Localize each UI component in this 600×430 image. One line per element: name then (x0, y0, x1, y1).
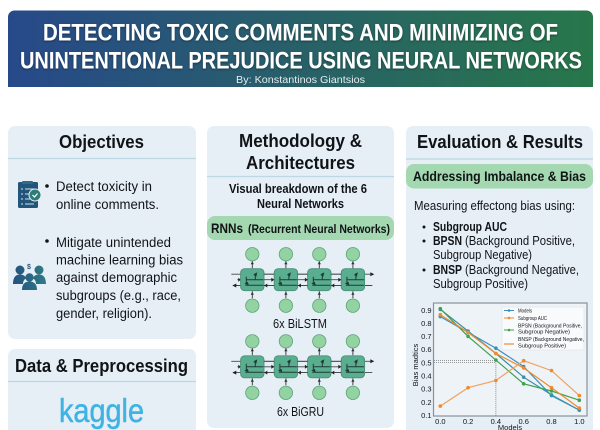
icon: people group: $ (27, 264, 31, 271)
diagram: BiLSTM (231, 248, 374, 312)
header banner (8, 10, 593, 87)
section pill: RNNs: RNNs (211, 220, 243, 236)
objective 2: machine learning bias (56, 252, 183, 268)
y axis ticks: 0.4 (421, 372, 432, 381)
legend: BPSN (Background Positive, (518, 324, 582, 330)
metrics list: Subgroup Positive) (433, 277, 528, 291)
subtitle: Neural Networks (257, 196, 344, 211)
subtitle: Visual breakdown of the 6 (229, 181, 367, 196)
metrics list (422, 220, 579, 291)
legend: Subgroup Negative) (518, 330, 570, 336)
metrics list: (Background Positive, (465, 234, 575, 248)
y axis ticks (421, 306, 432, 420)
title (20, 20, 582, 74)
objective 1: Detect toxicity in (56, 179, 152, 194)
x axis ticks (435, 417, 585, 426)
heading: evaluation: Evaluation & Results (417, 131, 583, 152)
heading: methodology: Methodology & (239, 130, 362, 151)
y axis ticks: 0.8 (421, 319, 432, 328)
x axis ticks: 0.0 (435, 417, 446, 426)
objective 2: gender, religion). (56, 306, 152, 321)
metrics list: Subgroup AUC (433, 220, 507, 234)
section pill: imbalance and bias (406, 164, 593, 188)
x axis ticks: 0.6 (518, 417, 529, 426)
reference lines (434, 361, 496, 416)
y axis ticks: 0.7 (421, 332, 432, 341)
metrics list: BNSP (433, 263, 462, 277)
heading: methodology: Architectures (246, 152, 355, 173)
heading: objectives: Objectives (59, 131, 144, 152)
x axis ticks: 0.4 (491, 417, 501, 426)
objective 1 (45, 179, 159, 212)
intro text: Measuring effectong bias using: (414, 198, 575, 213)
panel: evaluation and results (406, 126, 593, 430)
heading: methodology (239, 130, 362, 173)
y axis label: Bias madtics (411, 343, 420, 386)
y axis ticks: 0.9 (421, 306, 432, 315)
metrics list: BPSN (433, 234, 462, 248)
y axis ticks: 0.1 (421, 411, 432, 420)
objective 1: online comments. (56, 197, 159, 212)
y axis ticks: 0.6 (421, 345, 432, 354)
y axis ticks: 0.5 (421, 358, 432, 367)
y axis ticks: 0.3 (421, 385, 432, 394)
section pill: RNNs (207, 216, 394, 240)
objective 2: subgroups (e.g., race, (56, 288, 181, 303)
subtitle (229, 181, 367, 211)
metrics list: Subgroup Negative) (433, 248, 532, 262)
label: BiLSTM: 6x BiLSTM (273, 316, 327, 331)
metrics list: (Background Negative, (465, 263, 579, 277)
objective 2 (45, 235, 183, 321)
line chart: bias metrics (411, 303, 587, 430)
legend: Models (518, 308, 532, 314)
x axis ticks: 0.8 (546, 417, 557, 426)
diagram: BiGRU (231, 335, 374, 400)
series lines (440, 309, 579, 410)
section pill: RNNs: (Recurrent Neural Networks) (248, 222, 390, 236)
objective 2: Mitigate unintended (56, 235, 171, 250)
x axis ticks: 0.2 (463, 417, 473, 426)
legend (502, 307, 584, 350)
author byline: By: Konstantinos Giantsios (236, 74, 365, 86)
y axis ticks: 0.2 (421, 398, 432, 407)
legend: Subgroup Positive) (518, 344, 566, 350)
legend: BNSP (Background Negative, (518, 337, 584, 343)
icon: people group (13, 264, 46, 290)
panel: data and preprocessing (8, 349, 196, 430)
objective 2: against demographic (56, 270, 177, 285)
panel: objectives (8, 126, 196, 339)
label: BiGRU: 6x BiGRU (277, 404, 324, 419)
legend: Subgroup AUC (518, 316, 547, 322)
x axis ticks: 1.0 (574, 417, 585, 426)
heading: data and preprocessing: Data & Preprocessing (15, 355, 188, 376)
icon: checklist (18, 181, 41, 208)
logo: kaggle: kaggle (59, 392, 144, 429)
panel: methodology and architectures (207, 126, 394, 428)
